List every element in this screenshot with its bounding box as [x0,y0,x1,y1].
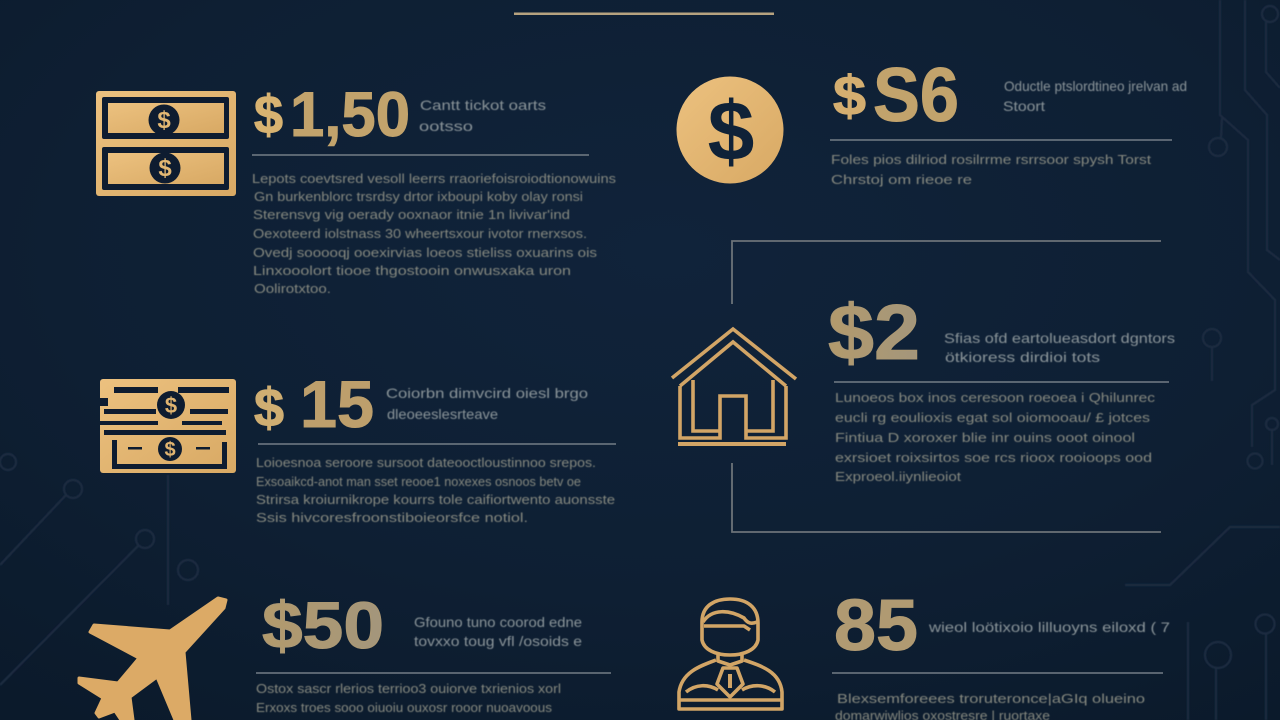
caption [1003,78,1187,114]
body text: Erxoxs troes sooo oiuoiu ouxosr rooor nuoavoous [256,701,552,715]
icon: stacked cash: $ [165,393,177,418]
icon: banknotes [96,91,236,196]
body text: Lepots coevtsred vesoll leerrs rraoriefoisroiodtionowuins [252,172,616,186]
icon: stacked cash [100,379,236,473]
body text: Chrstoj om rieoe re [831,173,972,187]
caption [414,614,582,649]
value: $50 [262,588,384,662]
body text: Ssis hivcoresfroonstiboieorsfce notiol. [256,511,528,525]
body text [835,391,1155,484]
value [254,367,374,441]
body text: Ovedj sooooqj ooexirvias loeos stieliss oxuarins ois [253,246,597,260]
body text: Linxooolort tiooe thgostooin onwusxaka uron [253,264,571,278]
icon: dollar coin: $ [708,84,754,178]
icon: house [672,329,796,444]
value: $2 [828,288,920,376]
body text: Oexoteerd iolstnass 30 wheertsxour ivotor rnerxsos. [253,227,587,241]
caption: Sfias ofd eartolueasdort dgntors [944,330,1175,346]
icon: banknotes: $ [157,107,171,134]
body text: Exsoaikcd-anot man sset reooe1 noxexes osnoos betv oe [256,475,581,489]
body text [252,172,616,296]
body text: Oolirotxtoo. [254,282,331,296]
body text: Foles pios dilriod rosilrrme rsrrsoor spysh Torst [831,153,1152,167]
panel: $15 [100,367,616,525]
caption [419,97,546,134]
body text [835,692,1145,720]
value [833,53,959,138]
caption: Stoort [1003,98,1045,114]
icon: dollar coin [676,76,784,184]
icon: airplane [79,598,226,720]
body text: Gn burkenblorc trsrdsy drtor ixboupi koby olay ronsi [254,190,583,204]
caption [386,385,588,422]
icon: person with tie [679,599,782,709]
value: $ [254,85,283,145]
panel: $50 [79,588,611,720]
body text: Sterensvg vig oerady ooxnaor itnie 1n livivar'ind [253,208,570,222]
value: 1,50 [290,80,410,150]
body text: Exproeol.iiynlieoiot [835,470,962,484]
icon: banknotes: $ [158,155,172,182]
panel: $1,50 [96,80,616,296]
caption: Oductle ptslordtineo jrelvan ad [1004,78,1187,94]
body text [256,682,561,715]
value: $ [254,378,284,438]
value: 15 [300,367,374,441]
panel: $2 [672,241,1175,532]
body text [256,456,615,525]
caption: Cantt tickot oarts [420,97,546,113]
icon: stacked cash: $ [164,439,176,461]
value: S6 [873,53,959,138]
body text: Fintiua D xoroxer blie inr ouins ooot oinool [835,431,1135,445]
body text: Ostox sascr rlerios terrioo3 ouiorve txrienios xorl [256,682,561,696]
caption: dleoeeslesrteave [387,406,498,422]
body text [831,153,1152,187]
value: $ [833,64,866,127]
panel: $S6 [676,53,1187,187]
frame [732,241,1161,532]
caption: Coiorbn dimvcird oiesl brgo [386,385,588,401]
caption: ootsso [419,118,473,134]
body text: Loioesnoa seroore sursoot dateooctloustinnoo srepos. [256,456,596,470]
body text: eucli rg eoulioxis egat sol oiomooau/ £ jotces [835,411,1150,425]
caption: wieol loötixoio lilluoyns eiloxd ( 7 [928,619,1170,635]
caption [944,330,1175,365]
caption: ötkioress dirdioi tots [945,349,1100,365]
body text: exrsioet roixsirtos soe rcs rioox rooioops ood [835,451,1152,465]
body text: Blexsemforeees troruteronce|aGIq olueino [837,692,1145,706]
top divider line [514,12,774,15]
value: 85 [834,586,918,666]
caption: Gfouno tuno coorod edne [414,614,582,630]
body text: Strirsa kroiurnikrope kourrs tole caifiortwento auonsste [256,493,615,507]
body text: Lunoeos box inos ceresoon roeoea i Qhilunrec [835,391,1155,405]
panel: 85 [679,586,1170,720]
caption: tovxxo toug vfl /osoids e [414,633,582,649]
